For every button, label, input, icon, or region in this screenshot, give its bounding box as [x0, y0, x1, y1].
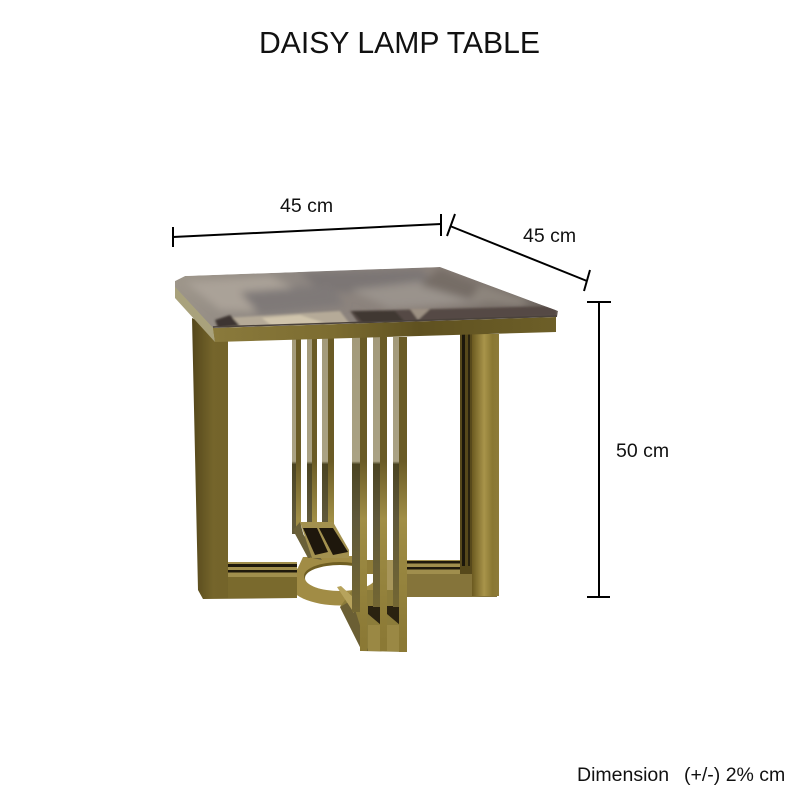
front foot — [337, 586, 407, 652]
marble veining — [185, 268, 530, 315]
dimension note: (+/-) 2% cm — [684, 764, 785, 786]
height label: 50 cm — [616, 440, 669, 462]
depth label: 45 cm — [523, 225, 576, 247]
dimension note — [577, 764, 785, 786]
back foot — [293, 522, 349, 560]
base ring — [287, 556, 424, 606]
title: DAISY LAMP TABLE — [259, 25, 540, 60]
back fins — [292, 338, 334, 534]
marble top — [175, 267, 558, 328]
dimension arrow: depth 45 cm — [447, 214, 590, 291]
frame side rail — [175, 286, 215, 342]
width label: 45 cm — [280, 195, 333, 217]
table illustration — [175, 267, 558, 652]
dimension arrow: height 50 cm — [587, 302, 611, 597]
right leg — [407, 334, 499, 597]
dimension note: Dimension — [577, 764, 669, 786]
left leg — [192, 318, 297, 599]
dimension arrow: width 45 cm — [173, 214, 441, 247]
front fins — [352, 337, 407, 652]
frame front rail — [213, 317, 556, 342]
